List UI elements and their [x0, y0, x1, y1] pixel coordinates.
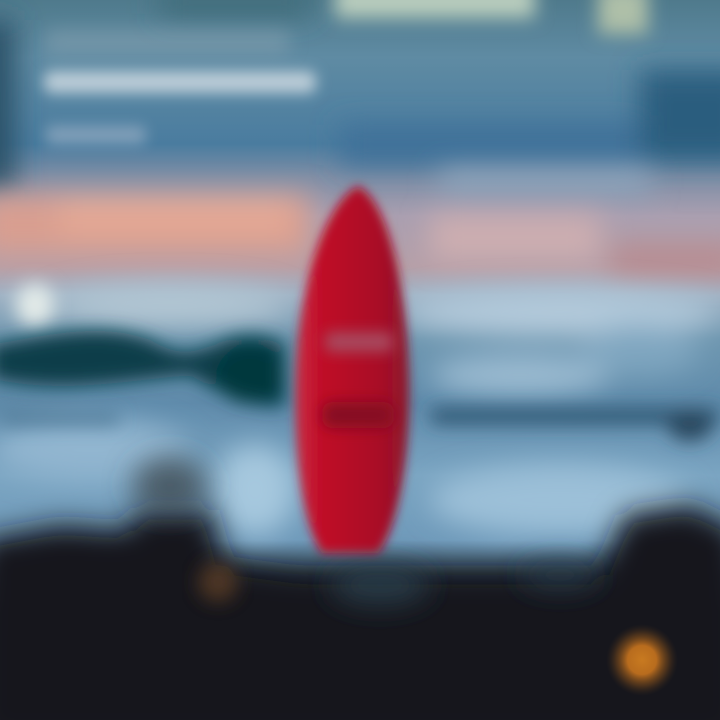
- sunset band: [0, 170, 720, 275]
- main title line (unreadable in the reference): [44, 71, 316, 93]
- orange badge glow: [606, 624, 678, 696]
- title block: placeholder bars for the illegible blurred text: [44, 30, 316, 144]
- rocky foreground: [0, 505, 720, 720]
- distant dark wave line: [0, 408, 720, 441]
- surfboard dark shadow band: [322, 402, 394, 428]
- bright clouds at the top: [335, 0, 648, 34]
- heading line (unreadable in the reference): [45, 30, 290, 54]
- dark sky edges: [0, 0, 720, 190]
- foam and waves: [0, 285, 720, 535]
- warm rock glint: [198, 562, 238, 602]
- dark green breaking wave: [0, 331, 285, 406]
- rock details: [132, 457, 600, 605]
- foam highlight: [15, 283, 55, 327]
- red surfboard: [295, 186, 409, 553]
- surfboard label band: [325, 332, 393, 352]
- subtitle line (unreadable in the reference): [46, 126, 146, 144]
